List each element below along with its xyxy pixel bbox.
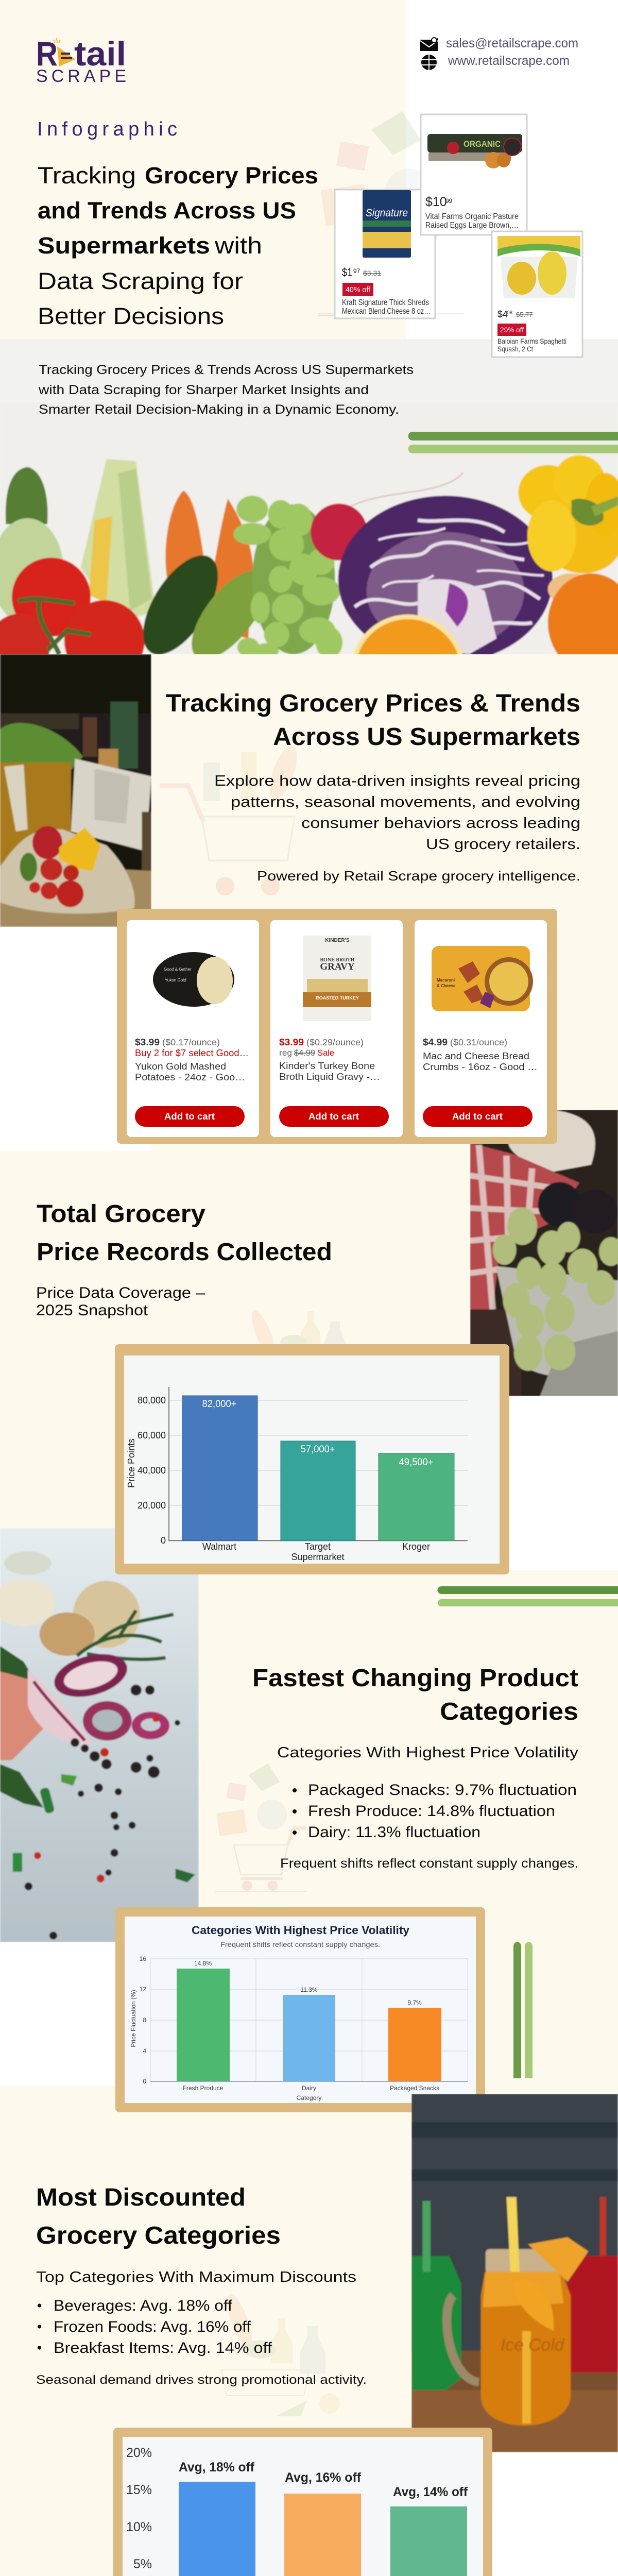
list: volatility bullets: Packaged Snacks: 9.7% fluctuation <box>308 1782 577 1799</box>
product card: Baloian spaghetti squash <box>492 231 582 357</box>
photo: grapes in bowl <box>470 1110 618 1396</box>
text: seasonal demand note: Seasonal demand drives strong promotional activity. <box>36 2373 367 2387</box>
text: intro paragraph: Tracking Grocery Prices & Trends Across US Supermarkets <box>39 363 414 377</box>
decorative bars: section four <box>438 1586 618 1606</box>
bar chart: price points by supermarket: 82,000+ <box>202 1399 237 1410</box>
text: intro paragraph: Smarter Retail Decision-Making in a Dynamic Economy. <box>39 402 399 417</box>
illustration: faint groceries above chart <box>247 1308 346 1361</box>
product card: Kraft cheese: Signature <box>366 207 408 219</box>
bar chart: price fluctuation by category: Frequent shifts reflect constant supply changes. <box>220 1940 380 1948</box>
panel: hero background <box>0 0 618 339</box>
bar chart: price points by supermarket <box>126 1387 468 1562</box>
heading: tracking grocery prices: Across US Supermarkets <box>273 723 580 751</box>
product card: Yukon Gold potatoes: ($0.17/ounce) <box>162 1037 220 1047</box>
heading: most discounted grocery categories: Grocery Categories <box>36 2222 281 2249</box>
product card: Baloian spaghetti squash: Squash, 2 Ct <box>497 345 533 353</box>
product card: Mac and cheese crumbs: Mac and Cheese Bread <box>423 1051 529 1061</box>
decorative bars: vertical pair section four <box>513 1942 533 2078</box>
bar chart: price fluctuation by category: Fresh Produce <box>183 2084 224 2092</box>
heading: fastest changing product categories <box>252 1665 578 1725</box>
illustration: faint cart with groceries <box>160 742 303 895</box>
list: discount bullets <box>38 2297 272 2357</box>
product card: Vital Farms eggs: Vital Farms Organic Pasture <box>425 212 519 221</box>
bar chart: price points by supermarket: 60,000 <box>138 1430 166 1440</box>
text: categories with highest price volatility: Categories With Highest Price Volatility <box>277 1744 579 1761</box>
heading: most discounted grocery categories: Most Discounted <box>36 2184 246 2211</box>
list: discount bullets: Frozen Foods: Avg. 16% off <box>54 2318 251 2335</box>
product card: Mac and cheese crumbs: & Cheese <box>437 984 456 988</box>
product card: Mac and cheese crumbs: $4.99 <box>423 1037 448 1047</box>
text: section intro: Explore how data-driven insights reveal pricing <box>214 773 580 789</box>
product card: Kinder's gravy: Kinder's Turkey Bone <box>279 1061 375 1071</box>
decorative bars: top band <box>408 432 618 453</box>
heading: tracking grocery prices <box>166 690 580 751</box>
heading: tracking grocery prices: Tracking Grocery Prices & Trends <box>166 690 580 717</box>
panel: volatility chart frame <box>115 1907 485 2112</box>
product card: Kraft cheese <box>335 190 435 318</box>
photo: onions and peppercorns <box>0 1528 199 1942</box>
product card: Baloian spaghetti squash: $4 <box>497 309 508 319</box>
product card: Mac and cheese crumbs: Crumbs - 16oz - Good … <box>423 1062 538 1072</box>
bar chart: average discount by category: 20% <box>126 2446 152 2460</box>
text: price data coverage: Price Data Coverage – <box>36 1284 205 1301</box>
list: discount bullets: Breakfast Items: Avg. 14% off <box>54 2340 272 2357</box>
faint baseline under hero illustration <box>318 315 334 316</box>
bar chart: price fluctuation by category: Categories With Highest Price Volatility <box>192 1924 410 1937</box>
bar chart: price fluctuation by category: Dairy <box>302 2084 316 2092</box>
photo: iced drink jar <box>411 2094 618 2452</box>
product card: Yukon Gold potatoes: Good & Gather <box>164 967 192 972</box>
text: section intro: patterns, seasonal movements, and evolving <box>231 794 580 810</box>
text: section intro: consumer behaviors across leading <box>301 815 580 832</box>
panel: section backgrounds <box>0 654 618 2576</box>
product card: Mac and cheese crumbs: Add to cart <box>452 1111 503 1122</box>
product card: Kraft cheese: Mexican Blend Cheese 8 oz… <box>342 307 431 316</box>
text: frequent shifts note: Frequent shifts reflect constant supply changes. <box>280 1856 578 1871</box>
bar chart: price points by supermarket: Walmart <box>202 1541 236 1552</box>
title: and Trends Across US <box>38 197 296 224</box>
contact: email: sales@retailscrape.com <box>446 36 578 50</box>
product card: Kraft cheese: $3.31 <box>363 269 381 277</box>
product card: Baloian spaghetti squash: 29% off <box>500 326 524 334</box>
product card: Kinder's gravy: GRAVY <box>320 961 355 972</box>
product card: Yukon Gold potatoes: $3.99 <box>135 1037 160 1047</box>
product card: Baloian spaghetti squash: $5.77 <box>516 311 533 318</box>
bar chart: price fluctuation by category: Price Fluctuation (%) <box>130 1990 137 2047</box>
bar chart: price points by supermarket: 49,500+ <box>399 1457 434 1468</box>
bar chart: price fluctuation by category: 0 <box>143 2078 146 2085</box>
logo: Retail Scrape: SCRAPE <box>36 66 126 86</box>
bar chart: price fluctuation by category: 4 <box>143 2047 146 2055</box>
illustration: faint shopping cart behind hero cards <box>318 111 464 314</box>
title: Data Scraping for <box>38 268 243 294</box>
heading: total grocery price records: Total Grocery <box>37 1200 205 1228</box>
bar chart: average discount by category: Avg, 14% off <box>393 2485 468 2499</box>
product card: Vital Farms eggs <box>421 114 527 235</box>
product card: Yukon Gold potatoes: Yukon Gold Mashed <box>135 1061 226 1072</box>
text: section intro <box>214 773 580 884</box>
product card: Kinder's gravy: Add to cart <box>308 1111 359 1122</box>
contact: website: www.retailscrape.com <box>448 54 570 68</box>
bar chart: price points by supermarket: Supermarket <box>291 1552 345 1562</box>
text: section intro: Powered by Retail Scrape grocery intelligence. <box>257 868 580 884</box>
product card: Mac and cheese crumbs: Macaroni <box>437 978 455 982</box>
product card: Mac and cheese crumbs <box>415 920 547 1137</box>
logo: Retail Scrape: R <box>36 35 58 73</box>
bar chart: average discount by category: Avg, 18% off <box>179 2460 255 2475</box>
bar chart: price fluctuation by category <box>130 1924 468 2102</box>
product card: Kinder's gravy: $3.99 <box>279 1037 304 1047</box>
bar chart: average discount by category: 15% <box>126 2483 152 2497</box>
title: Better Decisions <box>38 303 224 329</box>
bar chart: price fluctuation by category: 11.3% <box>300 1986 318 1993</box>
title: with <box>214 232 262 259</box>
heading: total grocery price records: Price Records Collected <box>37 1239 332 1266</box>
product card: Kinder's gravy: BONE BROTH <box>320 957 355 963</box>
bar chart: price fluctuation by category: 16 <box>140 1955 146 1962</box>
bar chart: price points by supermarket: Kroger <box>402 1541 430 1552</box>
list: volatility bullets <box>293 1782 577 1841</box>
product card: Baloian spaghetti squash: Baloian Farms Spaghetti <box>497 337 566 345</box>
list: discount bullets: Beverages: Avg. 18% off <box>54 2297 233 2314</box>
product card: Kraft cheese: 40% off <box>346 285 371 294</box>
product card: Kinder's gravy: KINDER'S <box>325 938 350 943</box>
product card: Kraft cheese: $1 <box>342 266 352 279</box>
title: Supermarkets <box>38 232 210 259</box>
product card: Yukon Gold potatoes: Add to cart <box>164 1111 215 1122</box>
bar chart: price fluctuation by category: 12 <box>140 1986 146 1993</box>
bar chart: price points by supermarket: 0 <box>161 1535 166 1546</box>
illustration: faint shopping cart section four <box>215 1764 306 1891</box>
product card: Kinder's gravy: Broth Liquid Gravy -… <box>279 1072 380 1082</box>
illustration: faint groceries section five <box>221 2292 340 2416</box>
title: Grocery Prices <box>145 162 318 189</box>
product card: Yukon Gold potatoes: Potatoes - 24oz - Goo… <box>135 1072 245 1082</box>
product card: Vital Farms eggs: 99 <box>445 197 453 205</box>
bar chart: price points by supermarket: 57,000+ <box>301 1444 335 1455</box>
panel: product cards frame <box>117 909 557 1144</box>
heading: most discounted grocery categories <box>36 2184 281 2249</box>
eyebrow: Infographic: Infographic <box>37 118 177 140</box>
title: Tracking <box>38 162 136 189</box>
product card: Yukon Gold potatoes: Yukon Gold <box>165 978 186 982</box>
bar chart: price points by supermarket: Target <box>305 1541 331 1552</box>
text: price data coverage <box>36 1284 205 1319</box>
bar chart: price fluctuation by category: Packaged Snacks <box>390 2084 439 2092</box>
product card: Kraft cheese: 97 <box>353 267 360 275</box>
product card: Mac and cheese crumbs: ($0.31/ounce) <box>450 1037 507 1047</box>
bar chart: price fluctuation by category: 9.7% <box>407 1999 422 2006</box>
text: section intro: US grocery retailers. <box>426 836 580 853</box>
panel: discounts chart frame <box>113 2428 492 2576</box>
bar chart: average discount by category: Avg, 16% off <box>285 2470 362 2485</box>
product card: Baloian spaghetti squash: 08 <box>507 310 513 316</box>
list: volatility bullets: Fresh Produce: 14.8% fluctuation <box>308 1803 555 1820</box>
photo: fresh vegetables <box>0 454 618 654</box>
bar chart: price points by supermarket: 40,000 <box>138 1465 166 1476</box>
heading: total grocery price records <box>37 1200 332 1266</box>
product card: Kinder's gravy: ROASTED TURKEY <box>316 995 359 1001</box>
product card: Vital Farms eggs: $10 <box>425 195 447 209</box>
bar chart: average discount by category: 5% <box>133 2557 152 2571</box>
product card: Vital Farms eggs: Raised Eggs Large Brown,… <box>425 221 519 230</box>
bar chart: price fluctuation by category: Category <box>297 2094 321 2102</box>
bar chart: average discount by category: 10% <box>126 2520 152 2534</box>
product card: Kinder's gravy: $4.99 <box>294 1048 315 1058</box>
logo: Retail Scrape: tail <box>74 35 126 73</box>
list: volatility bullets: Dairy: 11.3% fluctuation <box>308 1824 480 1841</box>
text: price data coverage: 2025 Snapshot <box>36 1302 148 1319</box>
panel: price records chart frame <box>115 1344 509 1574</box>
text: intro paragraph: with Data Scraping for Sharper Market Insights and <box>38 383 369 397</box>
product card: Kinder's gravy: Sale <box>317 1048 334 1058</box>
product card: Yukon Gold potatoes: Buy 2 for $7 select Good… <box>135 1048 249 1058</box>
product card: Yukon Gold potatoes <box>127 920 259 1137</box>
product card: Kinder's gravy <box>270 920 403 1137</box>
product card: Vital Farms eggs: ORGANIC <box>464 139 501 149</box>
photo: iced drink jar: Ice Cold <box>501 2336 565 2355</box>
heading: fastest changing product categories: Fastest Changing Product <box>252 1665 578 1692</box>
photo: market bag with vegetables <box>0 654 151 927</box>
bar chart: price points by supermarket: 20,000 <box>138 1500 166 1511</box>
text: intro paragraph <box>38 363 414 417</box>
text: top categories with maximum discounts: Top Categories With Maximum Discounts <box>36 2269 356 2285</box>
bar chart: price fluctuation by category: 14.8% <box>194 1960 212 1967</box>
product card: Kinder's gravy: reg <box>279 1048 292 1058</box>
panel: intro band background <box>0 339 618 654</box>
product card: Kinder's gravy: ($0.29/ounce) <box>306 1037 364 1047</box>
bar chart: price points by supermarket: Price Points <box>126 1438 136 1488</box>
logo: Retail Scrape <box>36 35 126 86</box>
bar chart: price points by supermarket: 80,000 <box>138 1395 166 1405</box>
product card: Kraft cheese: Kraft Signature Thick Shreds <box>342 298 429 307</box>
heading: fastest changing product categories: Categories <box>440 1698 578 1725</box>
title <box>38 162 318 329</box>
bar chart: price fluctuation by category: 8 <box>143 2016 146 2024</box>
bar chart: average discount by category <box>126 2446 483 2576</box>
